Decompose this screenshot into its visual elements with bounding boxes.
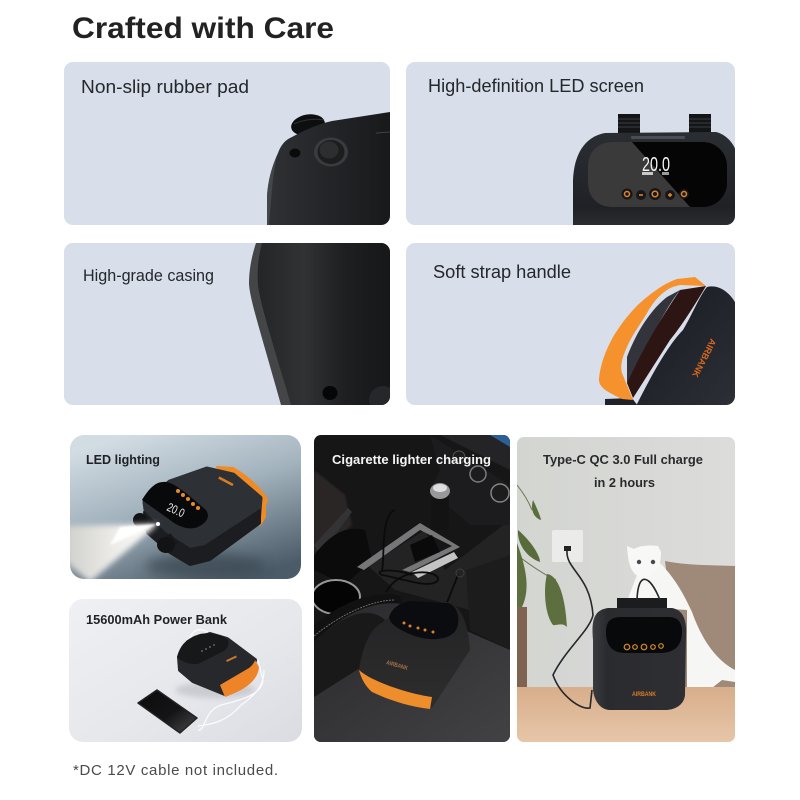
label: cigarette lighter charging: Cigarette lighter charging <box>332 453 491 467</box>
image: pump with LED beam: 20.0 <box>165 500 187 520</box>
image: pump with LED beam <box>66 467 267 582</box>
panel: 15600mAh power bank <box>69 599 302 742</box>
label: LED lighting: LED lighting <box>86 453 160 467</box>
panel: cigarette lighter charging <box>312 435 510 742</box>
label: power bank: 15600mAh Power Bank <box>86 613 227 627</box>
LED reading: 20.0 <box>642 154 670 176</box>
label: high-grade casing: High-grade casing <box>83 267 214 285</box>
image: car interior <box>312 435 510 742</box>
image: pump on table with cat <box>517 485 735 742</box>
image: pump front with LED screen <box>573 114 736 226</box>
image: pump charging phone <box>138 630 264 733</box>
label: non-slip rubber pad: Non-slip rubber pad <box>81 77 249 97</box>
image: casing close-up <box>249 243 397 414</box>
label: Type-C charging: Type-C QC 3.0 Full charge <box>543 453 703 467</box>
panel: high-definition LED screen <box>406 62 736 226</box>
image: orange strap and pump <box>599 277 736 406</box>
panel: non-slip rubber pad <box>64 62 390 225</box>
footnote: *DC 12V cable not included. <box>73 762 278 779</box>
panel: high-grade casing <box>64 243 397 414</box>
brand mark: AIRBANK <box>690 337 718 380</box>
label: soft strap handle: Soft strap handle <box>433 262 571 282</box>
image: pump on table with cat: AIRBANK <box>632 692 657 698</box>
label: Type-C charging: in 2 hours <box>594 476 655 490</box>
panel: LED lighting <box>66 435 301 582</box>
image: car interior: AIRBANK <box>385 660 409 672</box>
image: air pump rubber pad close-up <box>267 112 390 225</box>
panel: soft strap handle <box>406 243 736 406</box>
title: Crafted with Care <box>72 12 334 45</box>
panel: Type-C charging <box>517 437 735 742</box>
label: LED screen: High-definition LED screen <box>428 76 644 96</box>
